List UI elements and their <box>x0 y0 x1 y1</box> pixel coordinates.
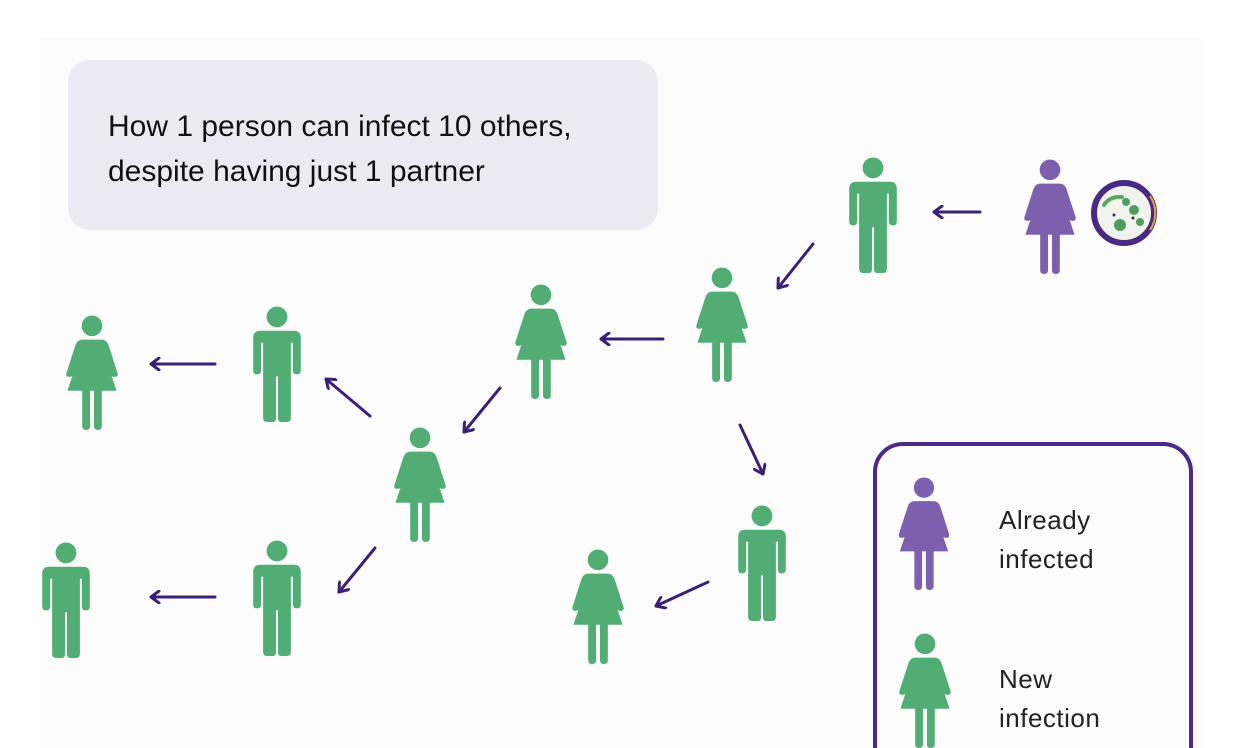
legend label: already infected <box>999 505 1094 574</box>
legend label: new infection: infection <box>999 703 1100 733</box>
legend <box>873 442 1193 748</box>
legend icons <box>899 478 949 590</box>
legend label: new infection: New <box>999 664 1053 694</box>
infected woman (purple) <box>1024 160 1076 274</box>
legend label: new infection <box>999 664 1100 733</box>
icon: germ circle <box>1094 183 1155 243</box>
arrows <box>151 212 980 606</box>
title: despite having just 1 partner <box>108 155 485 188</box>
legend label: already infected: Already <box>999 505 1091 535</box>
title: How 1 person can infect 10 others, <box>108 110 572 143</box>
title <box>68 60 658 230</box>
new infections (green) <box>42 158 897 664</box>
legend label: already infected: infected <box>999 544 1094 574</box>
